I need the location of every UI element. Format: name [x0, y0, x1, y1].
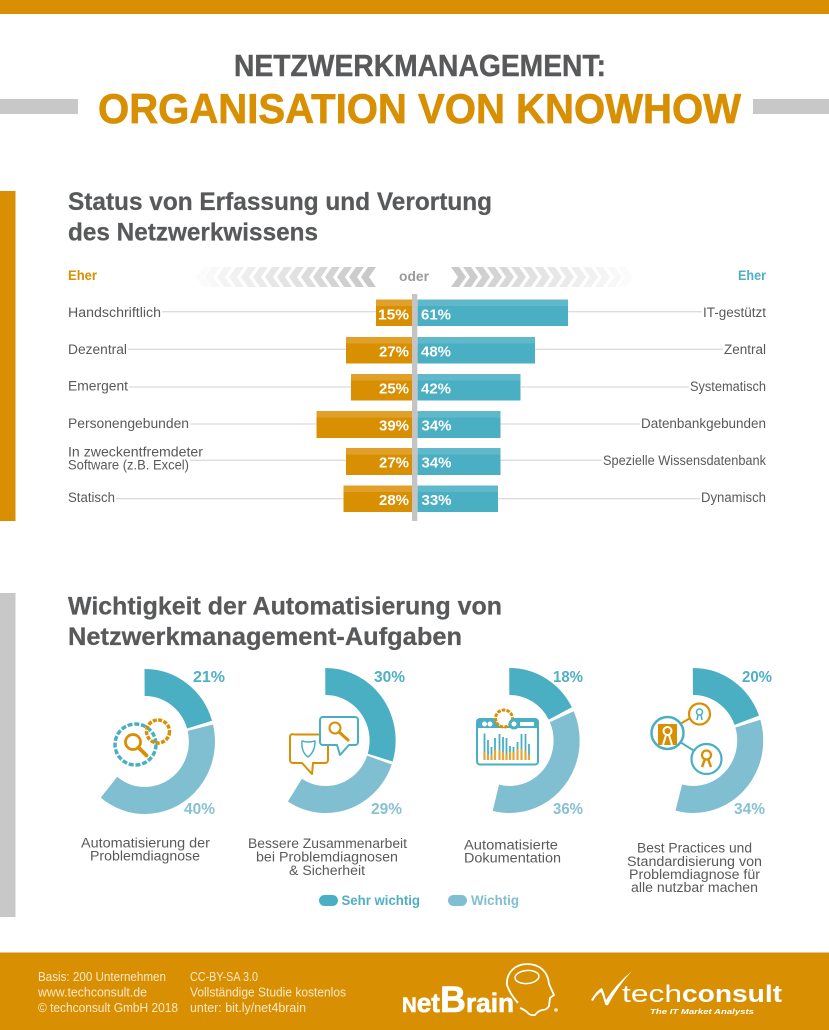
- donut 1: [88, 669, 225, 818]
- bar values: 25%: [379, 380, 409, 398]
- logo: techconsult: [591, 971, 782, 1016]
- left labels: [68, 305, 204, 505]
- logo: NetBrain: [402, 964, 558, 1020]
- center divider: [412, 294, 417, 521]
- footer: [0, 952, 829, 1030]
- donut 1: 40%: [184, 801, 215, 818]
- heading: status: des Netzwerkwissens: [68, 218, 318, 246]
- heading: wichtigkeit: Wichtigkeit der Automatisierung von: [68, 592, 502, 620]
- bar values: 28%: [379, 492, 409, 509]
- right labels: [603, 305, 766, 505]
- left labels: In zweckentfremdeter: [68, 444, 204, 460]
- donut 3: 18%: [553, 669, 583, 686]
- panel: status: [0, 188, 767, 521]
- panel: wichtigkeit: [0, 592, 772, 917]
- right labels: Dynamisch: [701, 490, 766, 505]
- donut 3: [453, 669, 583, 818]
- footer source text: CC-BY-SA 3.0: [190, 970, 258, 984]
- heading: status: Status von Erfassung und Verortung: [68, 188, 492, 216]
- title: NETZWERKMANAGEMENT:: [234, 48, 606, 83]
- left labels: Emergent: [68, 378, 128, 394]
- scale header: [68, 267, 767, 287]
- bar values: 27%: [379, 454, 409, 472]
- donut 2: [269, 669, 405, 818]
- caption 2: Bessere Zusammenarbeit: [248, 836, 407, 851]
- bars: eher left: [316, 300, 412, 512]
- title side bars: [0, 99, 829, 114]
- caption 4: [627, 840, 762, 895]
- icon: dashboard window: [477, 710, 538, 764]
- left labels: Handschriftlich: [68, 305, 161, 320]
- caption 4: Problemdiagnose für: [629, 867, 761, 882]
- donut 3: 36%: [553, 801, 583, 818]
- bar values: 27%: [379, 344, 409, 360]
- legend: [319, 892, 519, 908]
- donut 2: 30%: [374, 669, 405, 686]
- caption 1: [81, 836, 211, 864]
- caption 3: Dokumentation: [464, 850, 561, 866]
- caption 4: alle nutzbar machen: [631, 880, 758, 895]
- right labels: Spezielle Wissensdatenbank: [603, 453, 766, 468]
- bar values: [378, 306, 452, 509]
- caption 2: bei Problemdiagnosen: [256, 850, 398, 864]
- donut 4: 20%: [742, 669, 772, 686]
- top bar: [0, 0, 829, 14]
- logo: techconsult: The IT Market Analysts: [650, 1007, 754, 1016]
- panel accent bar: [0, 593, 16, 917]
- heading: wichtigkeit: Netzwerkmanagement-Aufgaben: [68, 623, 462, 651]
- row connector lines: [116, 312, 723, 499]
- caption 1: Problemdiagnose: [90, 849, 200, 864]
- right labels: IT-gestützt: [703, 305, 766, 320]
- bar values: 34%: [422, 418, 452, 434]
- icon: connected badges: [652, 704, 722, 774]
- caption 4: Standardisierung von: [627, 854, 762, 869]
- bars: eher right: [418, 300, 568, 512]
- footer source text: Vollständige Studie kostenlos: [190, 986, 346, 1000]
- heading: status: [68, 188, 492, 246]
- bar values: 42%: [421, 380, 451, 398]
- left labels: Statisch: [68, 490, 115, 505]
- footer source text: www.techconsult.de: [37, 986, 147, 1000]
- right labels: Datenbankgebunden: [641, 416, 766, 431]
- footer source text: Basis: 200 Unternehmen: [38, 970, 166, 984]
- panel accent bar: [0, 191, 16, 521]
- bar values: 34%: [422, 454, 452, 472]
- caption 2: & Sicherheit: [289, 863, 365, 878]
- logo: NetBrain: NetBrain: [402, 979, 514, 1020]
- footer source text: unter: bit.ly/net4brain: [190, 1001, 306, 1015]
- icon: gears with magnifier: [115, 720, 170, 765]
- right labels: Zentral: [724, 342, 766, 357]
- logo: techconsult: consult: [682, 981, 782, 1008]
- footer source text: [37, 970, 346, 1015]
- right labels: Systematisch: [690, 379, 766, 394]
- left labels: Software (z.B. Excel): [68, 458, 189, 472]
- donut 1: 21%: [193, 669, 225, 686]
- caption 3: Automatisierte: [464, 838, 558, 852]
- bar values: 48%: [421, 344, 451, 360]
- heading: wichtigkeit: [68, 592, 502, 651]
- scale header: Eher: [68, 268, 98, 283]
- donut 4: [636, 669, 772, 818]
- bar values: 39%: [379, 418, 409, 434]
- caption 3: [464, 838, 561, 866]
- title: ORGANISATION VON KNOWHOW: [98, 85, 741, 132]
- caption 4: Best Practices und: [637, 840, 752, 856]
- title: [98, 48, 741, 132]
- donut 4: 34%: [734, 801, 765, 818]
- caption 1: Automatisierung der: [81, 836, 211, 850]
- logo: techconsult: tech: [622, 981, 682, 1008]
- legend: Wichtig: [471, 892, 519, 908]
- scale header: oder: [399, 269, 430, 284]
- donut 2: 29%: [371, 801, 402, 818]
- bar values: 33%: [422, 492, 452, 509]
- left labels: Personengebunden: [68, 416, 189, 431]
- scale header: Eher: [738, 268, 767, 283]
- icon: speech bubbles: [290, 717, 358, 774]
- diverging bar chart: [316, 294, 568, 521]
- bar values: 15%: [378, 306, 409, 323]
- caption 2: [248, 836, 407, 878]
- footer source text: © techconsult GmbH 2018: [38, 1001, 178, 1015]
- bar values: 61%: [421, 306, 451, 323]
- legend: Sehr wichtig: [342, 892, 420, 908]
- left labels: Dezentral: [68, 342, 127, 357]
